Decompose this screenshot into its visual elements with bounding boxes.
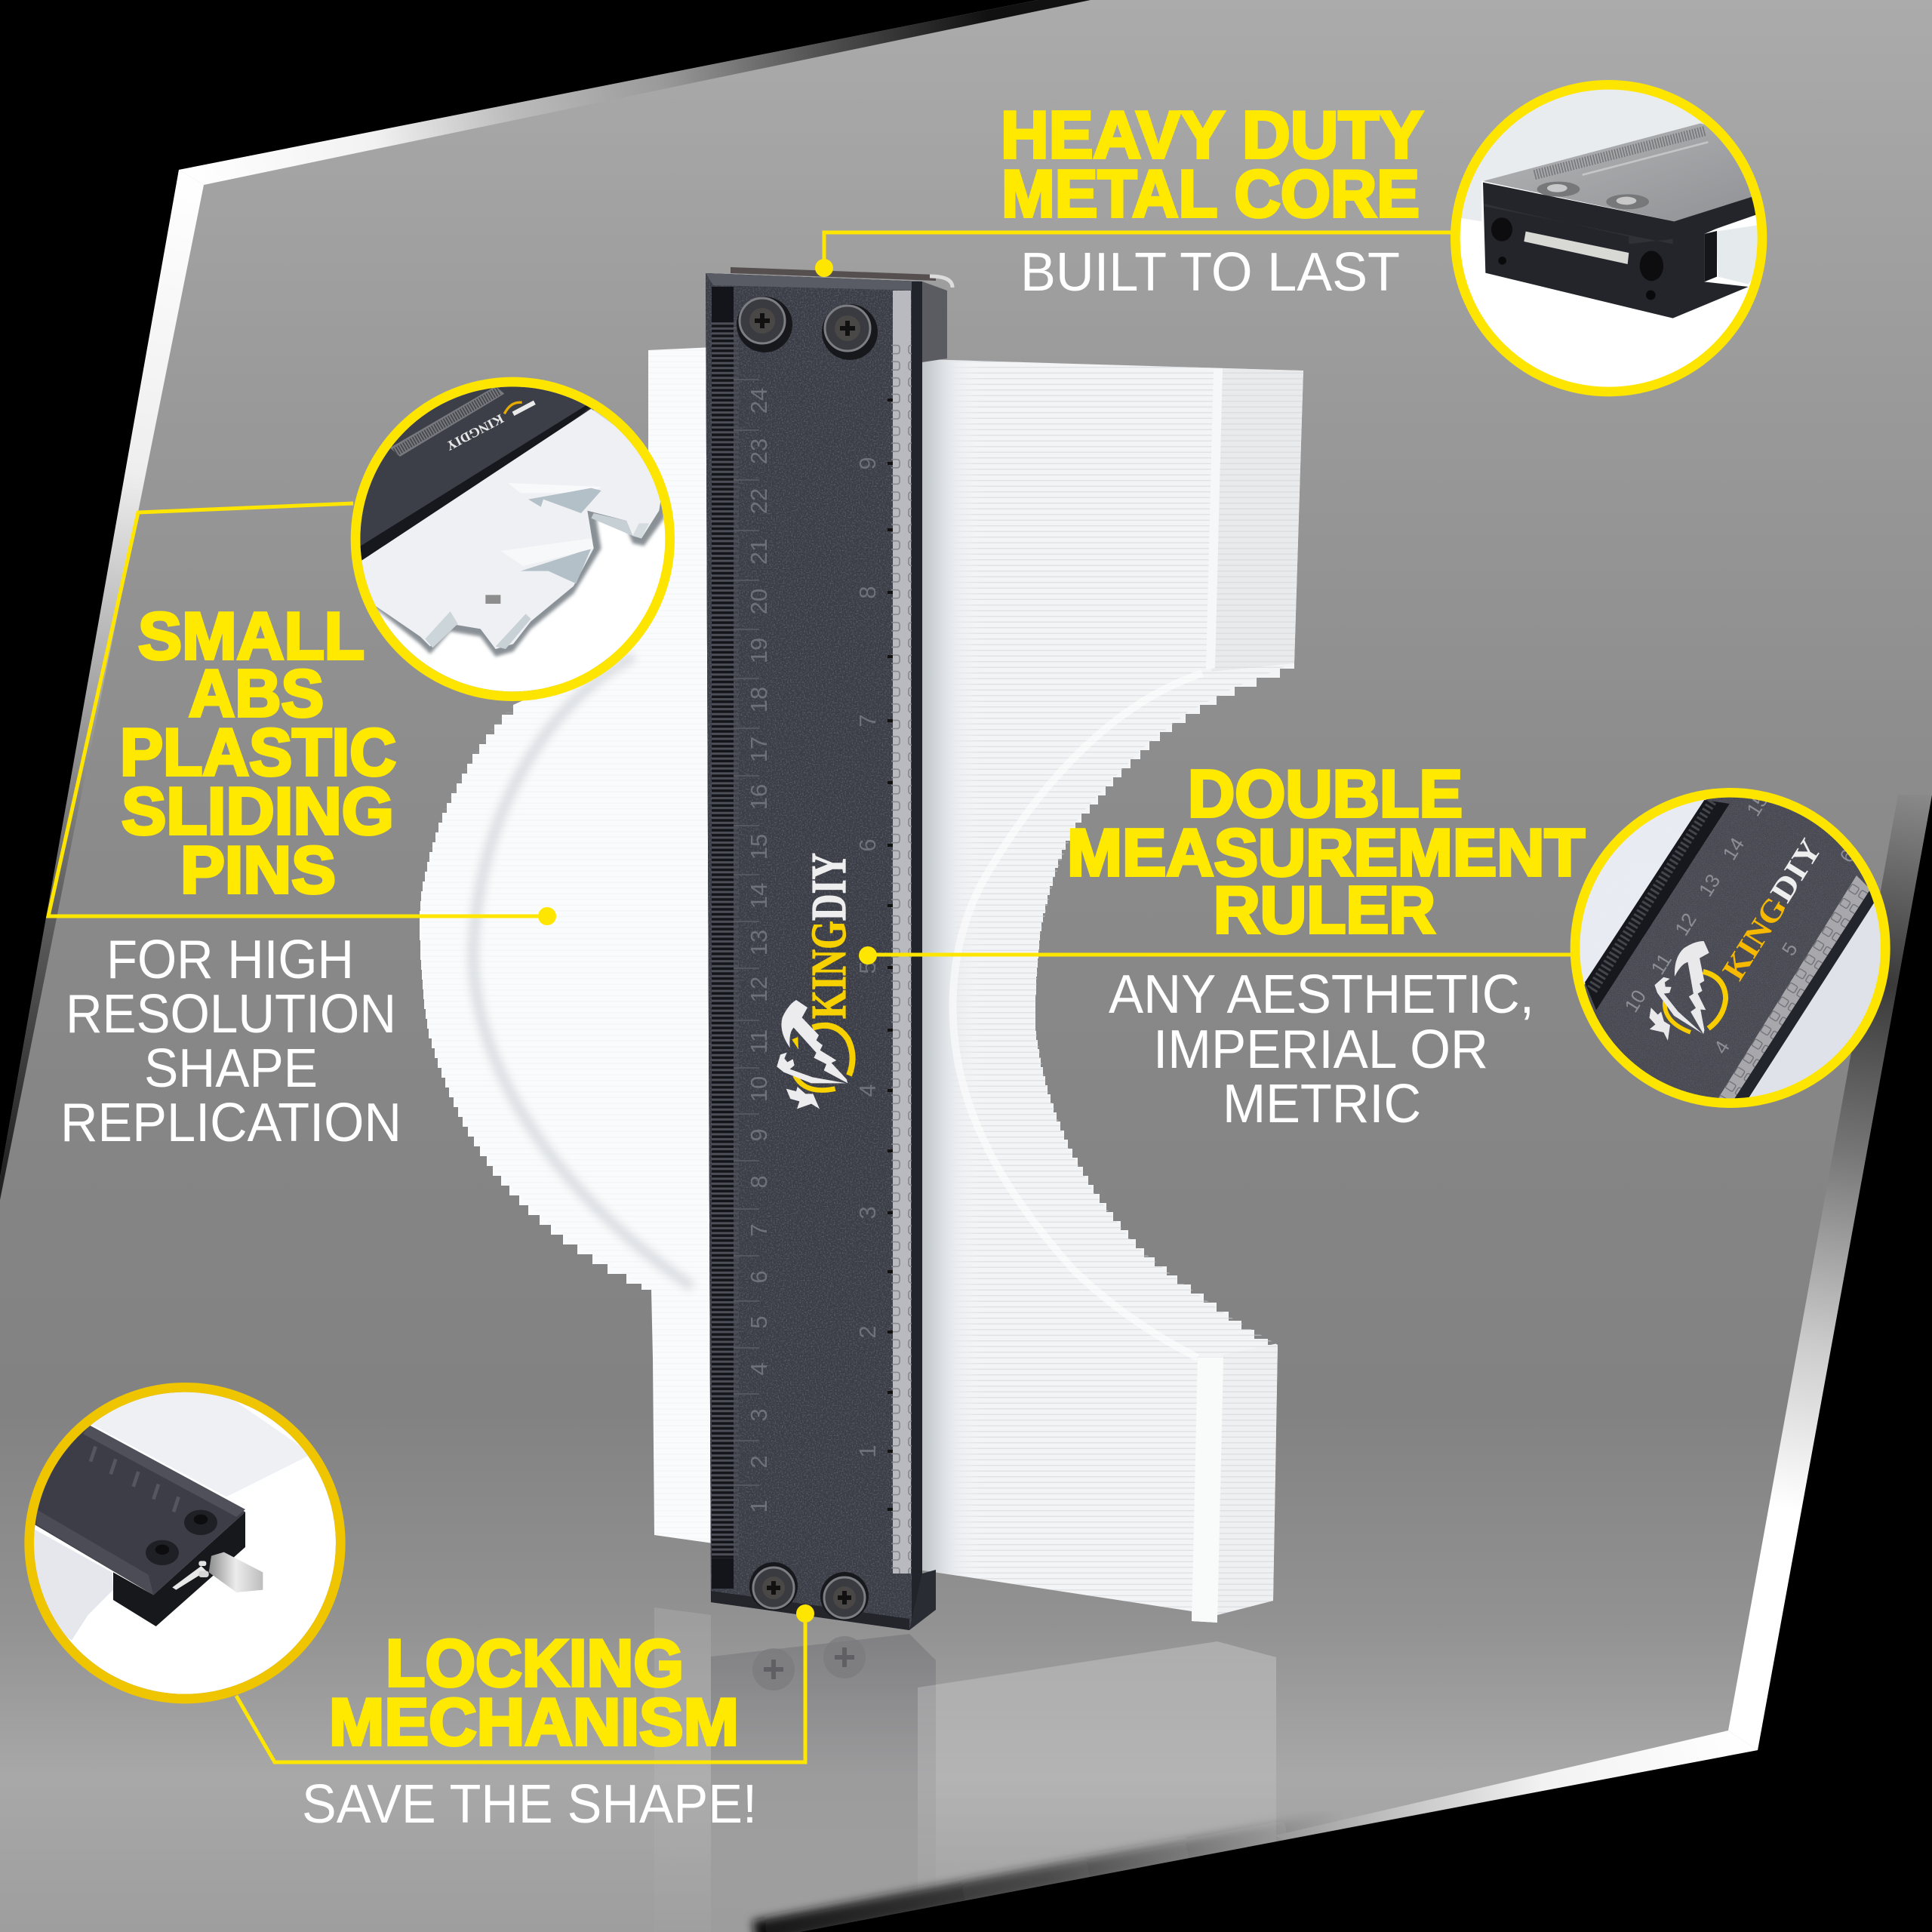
callout circle: double ruler close-up: 15 [1742, 789, 1773, 820]
imperial scale numbers: 4 [854, 1084, 881, 1097]
callout circle: double ruler close-up: KING [1716, 891, 1794, 986]
text block: double measurement ruler: DOUBLE [1188, 756, 1463, 831]
text block: double measurement ruler: MEASUREMENT [1067, 815, 1585, 890]
side bracket [922, 281, 947, 362]
imperial scale numbers: 8 [854, 586, 881, 599]
text block: heavy duty metal core [1001, 97, 1423, 303]
callout circle: double ruler close-up: 6 [1835, 845, 1860, 866]
imperial scale numbers: 6 [854, 838, 881, 852]
metric scale numbers: 17 [746, 737, 772, 762]
text block: heavy duty metal core: METAL CORE [1001, 156, 1420, 231]
callout circle: double ruler close-up: DIY [1764, 833, 1829, 909]
callout circle: sliding pins close-up [340, 377, 672, 697]
metal clip at the top of the ruler [731, 267, 952, 288]
leader line: double ruler [859, 946, 1571, 964]
metric scale numbers: 10 [746, 1076, 772, 1102]
metric scale numbers: 15 [746, 834, 772, 860]
metric scale numbers: 1 [746, 1500, 772, 1513]
metric scale numbers: 19 [746, 638, 772, 663]
metric scale numbers: 22 [746, 488, 772, 514]
text block: locking mechanism: LOCKING [386, 1626, 684, 1700]
text block: heavy duty metal core: BUILT TO LAST [1020, 242, 1400, 303]
ruler face with speckle [706, 273, 924, 1632]
metric scale numbers: 16 [746, 784, 772, 810]
text block: small ABS plastic sliding pins: FOR HIGH [106, 930, 354, 990]
right pins: contour curve [919, 355, 1312, 1630]
text block: small ABS plastic sliding pins: PLASTIC [120, 715, 396, 789]
metric scale numbers: 12 [746, 977, 772, 1002]
metric scale numbers: 6 [746, 1270, 772, 1284]
metric scale numbers: 8 [746, 1175, 772, 1189]
left pins: contour curve [415, 343, 717, 1551]
callout circle: metal core close-up [1449, 68, 1766, 392]
callout circle: double ruler close-up: 5 [1777, 938, 1802, 960]
metric scale numbers: 4 [746, 1362, 772, 1376]
metric scale numbers: 2 [746, 1455, 772, 1469]
callout circle: double ruler close-up: 12 [1670, 909, 1701, 940]
imperial scale numbers: 5 [854, 961, 881, 974]
metric scale numbers: 9 [746, 1128, 772, 1142]
metric scale numbers [746, 388, 772, 1513]
callout circle: double ruler close-up: 14 [1718, 833, 1749, 864]
callout circle: double ruler close-up: 11 [1646, 949, 1676, 979]
text block: double measurement ruler: RULER [1214, 872, 1435, 947]
text block: locking mechanism: SAVE THE SHAPE! [302, 1774, 757, 1835]
callout circle: double ruler close-up: 13 [1694, 870, 1724, 900]
text block: small ABS plastic sliding pins: RESOLUTION [66, 984, 396, 1044]
text block: small ABS plastic sliding pins: SLIDING [122, 774, 394, 848]
imperial scale numbers: 1 [854, 1444, 881, 1458]
imperial scale numbers: 7 [854, 714, 881, 728]
KINGDIY wordmark: KING [801, 921, 857, 1019]
leader line: sliding pins [48, 503, 556, 925]
imperial scale numbers: 9 [854, 457, 881, 470]
metric scale numbers: 11 [746, 1029, 772, 1054]
callout circle: double ruler close-up: 10 [1620, 986, 1651, 1017]
metric scale numbers: 3 [746, 1408, 772, 1422]
text block: double measurement ruler: IMPERIAL OR [1153, 1020, 1488, 1080]
callout circle: locking mechanism close-up [29, 1381, 340, 1699]
callout circle: sliding pins close-up: KINGDIY [443, 411, 506, 454]
text block: small ABS plastic sliding pins: SMALL [138, 598, 365, 673]
text block: heavy duty metal core: HEAVY DUTY [1001, 97, 1423, 172]
KINGDIY logo icon [777, 1000, 853, 1109]
metric scale numbers: 5 [746, 1315, 772, 1329]
imperial scale numbers: 2 [854, 1325, 881, 1339]
text block: double measurement ruler: METRIC [1223, 1074, 1421, 1134]
leader line: metal core [815, 232, 1454, 277]
KINGDIY wordmark: DIY [801, 853, 857, 921]
callout circle: double ruler close-up: 4 [1709, 1036, 1734, 1058]
imperial scale numbers: 3 [854, 1206, 881, 1220]
ruler body [706, 273, 936, 1630]
metric scale numbers: 24 [746, 388, 772, 414]
metric scale numbers: 14 [746, 883, 772, 909]
metric scale numbers: 7 [746, 1223, 772, 1237]
text block: double measurement ruler [1067, 756, 1585, 1134]
text block: small ABS plastic sliding pins: REPLICATION [60, 1093, 401, 1153]
metric scale numbers: 23 [746, 438, 772, 464]
text block: small ABS plastic sliding pins [60, 598, 401, 1153]
ruler: black measuring bar with scales [706, 267, 952, 1632]
text block: small ABS plastic sliding pins: SHAPE [144, 1038, 318, 1099]
screws [737, 297, 878, 1620]
text block: locking mechanism [302, 1626, 757, 1835]
imperial scale numbers [854, 457, 881, 1458]
metric scale numbers: 13 [746, 930, 772, 955]
floor reflection of the gauge [654, 1607, 1276, 1932]
metric scale numbers: 20 [746, 589, 772, 614]
text block: double measurement ruler: ANY AESTHETIC, [1109, 964, 1534, 1025]
leader line: locking mechanism [236, 1604, 814, 1762]
text block: small ABS plastic sliding pins: ABS [189, 656, 324, 731]
text block: small ABS plastic sliding pins: PINS [180, 832, 336, 907]
text block: locking mechanism: MECHANISM [329, 1684, 739, 1759]
metric scale numbers: 21 [746, 539, 772, 565]
callout circle: double ruler close-up [1570, 788, 1890, 1108]
metric scale numbers: 18 [746, 687, 772, 712]
